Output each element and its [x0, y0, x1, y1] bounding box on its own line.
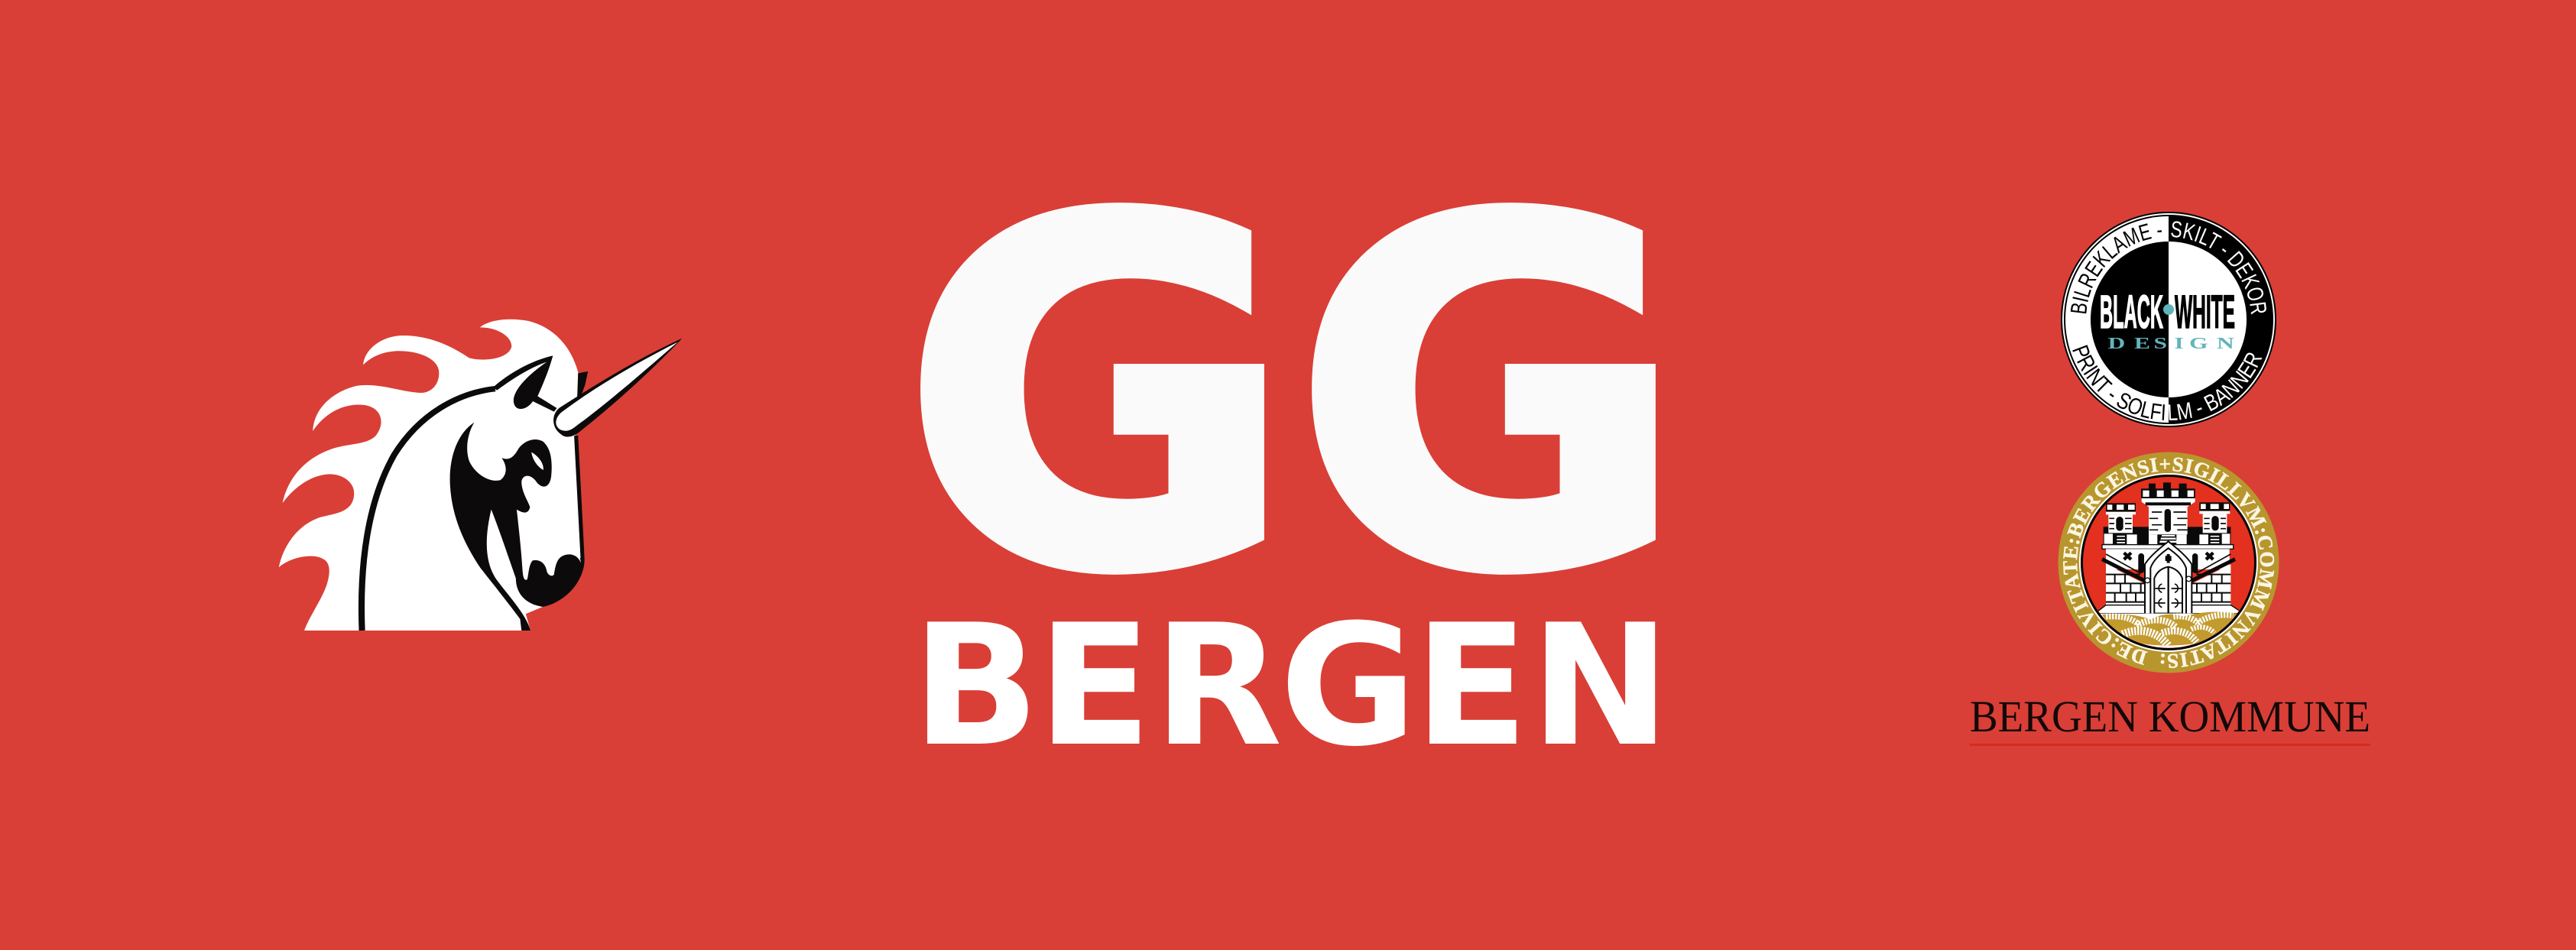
logo: Black White Design badge [2061, 212, 2276, 427]
logo: Black White Design badge: BLACK [2100, 286, 2163, 338]
eye [531, 452, 543, 470]
black band behind towers [2104, 527, 2230, 546]
seal rings [2058, 452, 2279, 673]
badge rings [2061, 212, 2276, 427]
muzzle line [576, 436, 582, 559]
icon: unicorn head logo [279, 319, 682, 631]
ring text: top right: SKILT - DEKOR [2171, 222, 2266, 315]
left tower [2106, 503, 2136, 533]
logo: Bergen city seal [2058, 452, 2279, 673]
ring text: bottom left: PRINT - SOLFI [2072, 345, 2165, 420]
teal dot [2163, 304, 2174, 315]
icon: castle on hills [2097, 482, 2240, 648]
wordmark: DESIGN: DESIGN [2107, 334, 2234, 352]
upper wall [2102, 545, 2234, 573]
hills [2100, 611, 2237, 648]
subtitle: BERGEN: BERGEN [912, 588, 1670, 783]
lower wall left [2098, 554, 2146, 614]
ear [493, 355, 556, 412]
ring text: bottom right: LM - BANNER [2169, 353, 2263, 420]
title: GG: GG [902, 120, 1685, 676]
battlement squares [2104, 533, 2230, 545]
rule under Bergen Kommune [1970, 744, 2370, 746]
ring text: top left: BILREKLAME - [2070, 223, 2162, 313]
logo: Black White Design badge: WHITE [2175, 286, 2235, 338]
lower wall right [2192, 554, 2240, 614]
gate [2145, 541, 2192, 614]
central tower [2141, 482, 2195, 543]
neck line [362, 389, 495, 631]
seal ring inscription: DE:CIVITATE:BERGENSI+SIGILLVM:COMMVNITATIS: [2062, 457, 2275, 668]
right tower [2199, 502, 2230, 533]
face markings [450, 423, 585, 631]
horn [553, 339, 682, 437]
heading: Bergen Kommune: BERGEN KOMMUNE [1970, 692, 2370, 741]
white mane and head silhouette [279, 319, 585, 631]
forelock tuft [577, 371, 588, 397]
